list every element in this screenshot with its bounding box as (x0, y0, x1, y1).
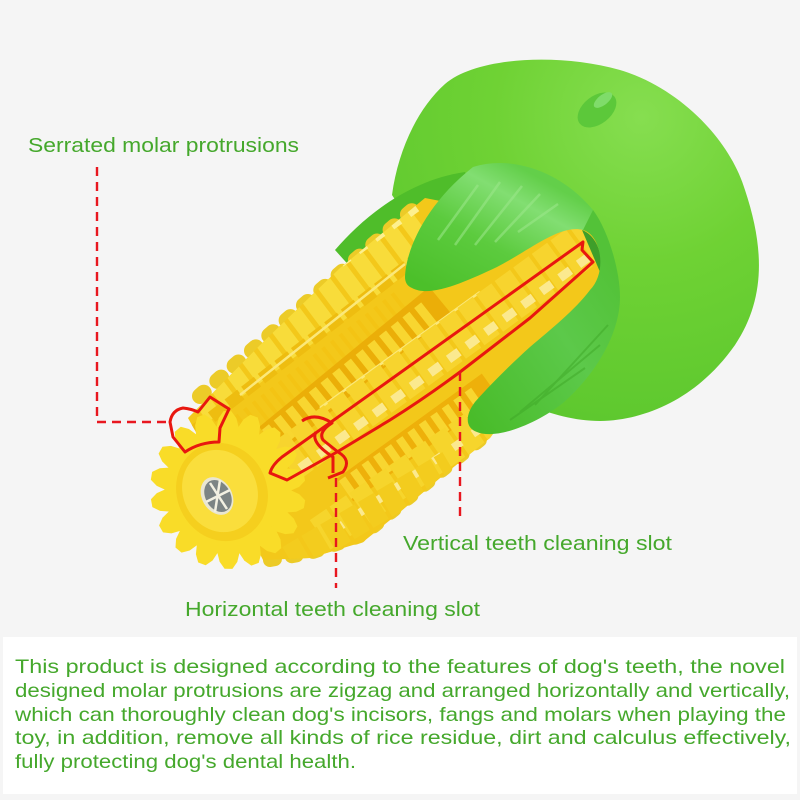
corn cob (150, 198, 600, 569)
disc nub (571, 85, 623, 135)
leader: vertical slot (459, 372, 461, 520)
label: serrated molar protrusions: Serrated molar protrusions (28, 134, 299, 157)
lower husk leaf (468, 210, 620, 434)
description text: designed molar protrusions are zigzag and arranged horizontally and vertically, (15, 680, 790, 702)
red outline: serrated molar protrusion (170, 397, 229, 452)
midrib and fishbone teeth (225, 300, 405, 440)
scalloped silhouette kernels (200, 204, 490, 560)
red outline: vertical slot (270, 242, 593, 480)
toy illustration: corn dog chew (127, 60, 759, 591)
description text: which can thoroughly clean dog's incisors, fangs and molars when playing the (14, 704, 786, 726)
lower teeth and kernels (345, 385, 490, 490)
description text (14, 656, 791, 773)
vertical slot teeth (270, 300, 440, 440)
center vent (194, 471, 240, 521)
green suction disc (392, 60, 759, 421)
description text: toy, in addition, remove all kinds of rice residue, dirt and calculus effectively, (15, 727, 791, 749)
label: horizontal teeth cleaning slot: Horizontal teeth cleaning slot (185, 598, 480, 621)
label: vertical teeth cleaning slot: Vertical teeth cleaning slot (403, 532, 672, 555)
hood window shadow (582, 230, 601, 272)
upper husk leaf (405, 163, 594, 291)
red band kernels (285, 240, 590, 462)
description text: This product is designed according to the features of dog's teeth, the novel (15, 656, 785, 678)
leader: horizontal slot (335, 478, 337, 588)
cob base (188, 198, 612, 560)
gear end face (127, 389, 329, 591)
leader: serrated molar (97, 167, 170, 422)
description text: fully protecting dog's dental health. (15, 751, 356, 773)
back husk (335, 172, 500, 300)
upper kernel row (190, 222, 425, 398)
red outline: horizontal slot (302, 417, 347, 478)
description panel (3, 637, 797, 794)
